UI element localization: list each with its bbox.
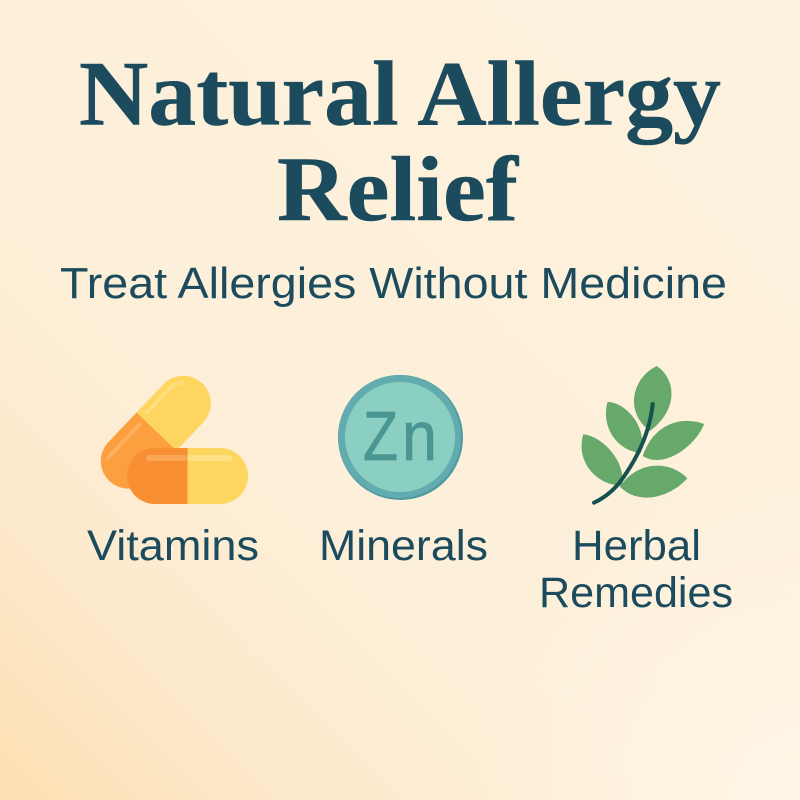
icon: herb sprig bbox=[582, 366, 704, 503]
title: Natural Allergy bbox=[79, 42, 721, 144]
subtitle: Treat Allergies Without Medicine bbox=[60, 259, 727, 308]
title: Relief bbox=[277, 138, 519, 240]
label: vitamins: Vitamins bbox=[87, 522, 259, 570]
icon: zinc mineral coin bbox=[338, 375, 463, 500]
icon: vitamin capsules bbox=[89, 364, 248, 504]
icon: zinc mineral coin: n bbox=[402, 397, 437, 475]
icon: zinc mineral coin: Z bbox=[363, 397, 398, 475]
title bbox=[79, 42, 721, 240]
label: herbal remedies: Remedies bbox=[539, 569, 733, 617]
label: minerals: Minerals bbox=[319, 522, 488, 570]
label: herbal remedies bbox=[539, 522, 733, 617]
label: herbal remedies: Herbal bbox=[572, 522, 701, 570]
